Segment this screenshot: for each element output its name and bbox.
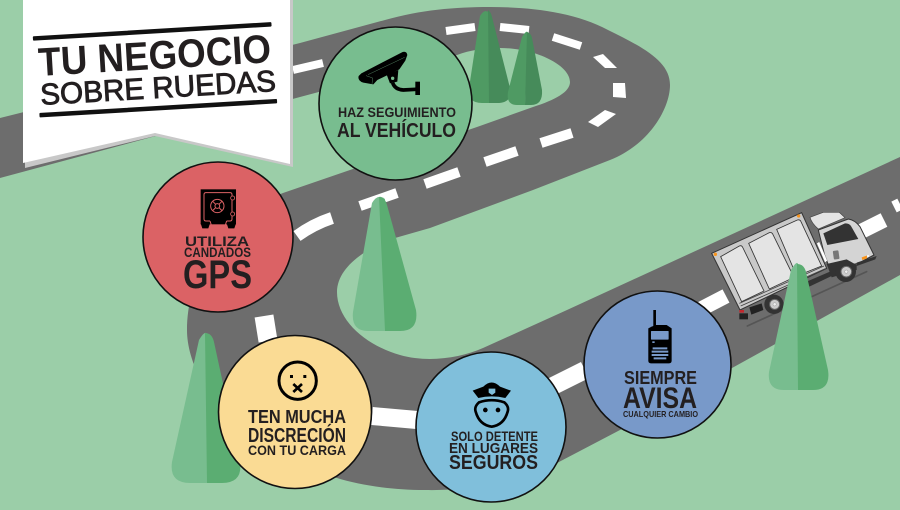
icon: safe: [201, 189, 236, 228]
truck: [712, 212, 877, 326]
text: siempre: SIEMPRE: [624, 368, 697, 388]
tree: dark small top: [508, 32, 542, 105]
panel: lugares seguros: [416, 352, 566, 502]
text: con tu carga: CON TU CARGA: [248, 442, 346, 458]
panel: discrecion: [218, 336, 372, 488]
panel: candados gps: [143, 162, 293, 312]
panel: haz seguimiento: [319, 27, 472, 180]
title text: [33, 22, 277, 118]
text: discrecion: DISCRECIÓN: [248, 423, 346, 447]
tree: dark large top: [469, 10, 510, 103]
text: ten mucha: TEN MUCHA: [248, 407, 346, 427]
cab: [810, 212, 877, 277]
text: haz seguimiento: HAZ SEGUIMIENTO: [338, 104, 456, 120]
text: gps: GPS: [183, 253, 252, 297]
road dashes: [264, 27, 900, 420]
icon: police officer: [473, 382, 511, 427]
text: utiliza: UTILIZA: [185, 233, 249, 249]
wheels: [764, 261, 856, 314]
title text: SOBRE RUEDAS: [39, 65, 277, 112]
icon: walkie-talkie: [648, 310, 672, 363]
tree: lower left: [172, 333, 240, 483]
text: cualquier cambio: CUALQUIER CAMBIO: [623, 409, 698, 419]
icon: silent face: [279, 362, 316, 399]
tree: right, in front of truck: [769, 263, 828, 390]
text: seguros: SEGUROS: [449, 452, 538, 474]
text: solo detente: SOLO DETENTE: [451, 428, 538, 444]
title banner: [23, 0, 293, 168]
text: en lugares: EN LUGARES: [449, 440, 538, 457]
text: avisa: AVISA: [623, 382, 697, 415]
tree: centre: [353, 197, 416, 331]
text: al vehiculo: AL VEHÍCULO: [337, 119, 456, 142]
icon: security camera: [358, 52, 420, 95]
text: candados: CANDADOS: [184, 244, 251, 260]
cargo box: [712, 213, 832, 319]
title text: TU NEGOCIO: [37, 27, 272, 85]
panel: siempre avisa: [584, 291, 731, 438]
